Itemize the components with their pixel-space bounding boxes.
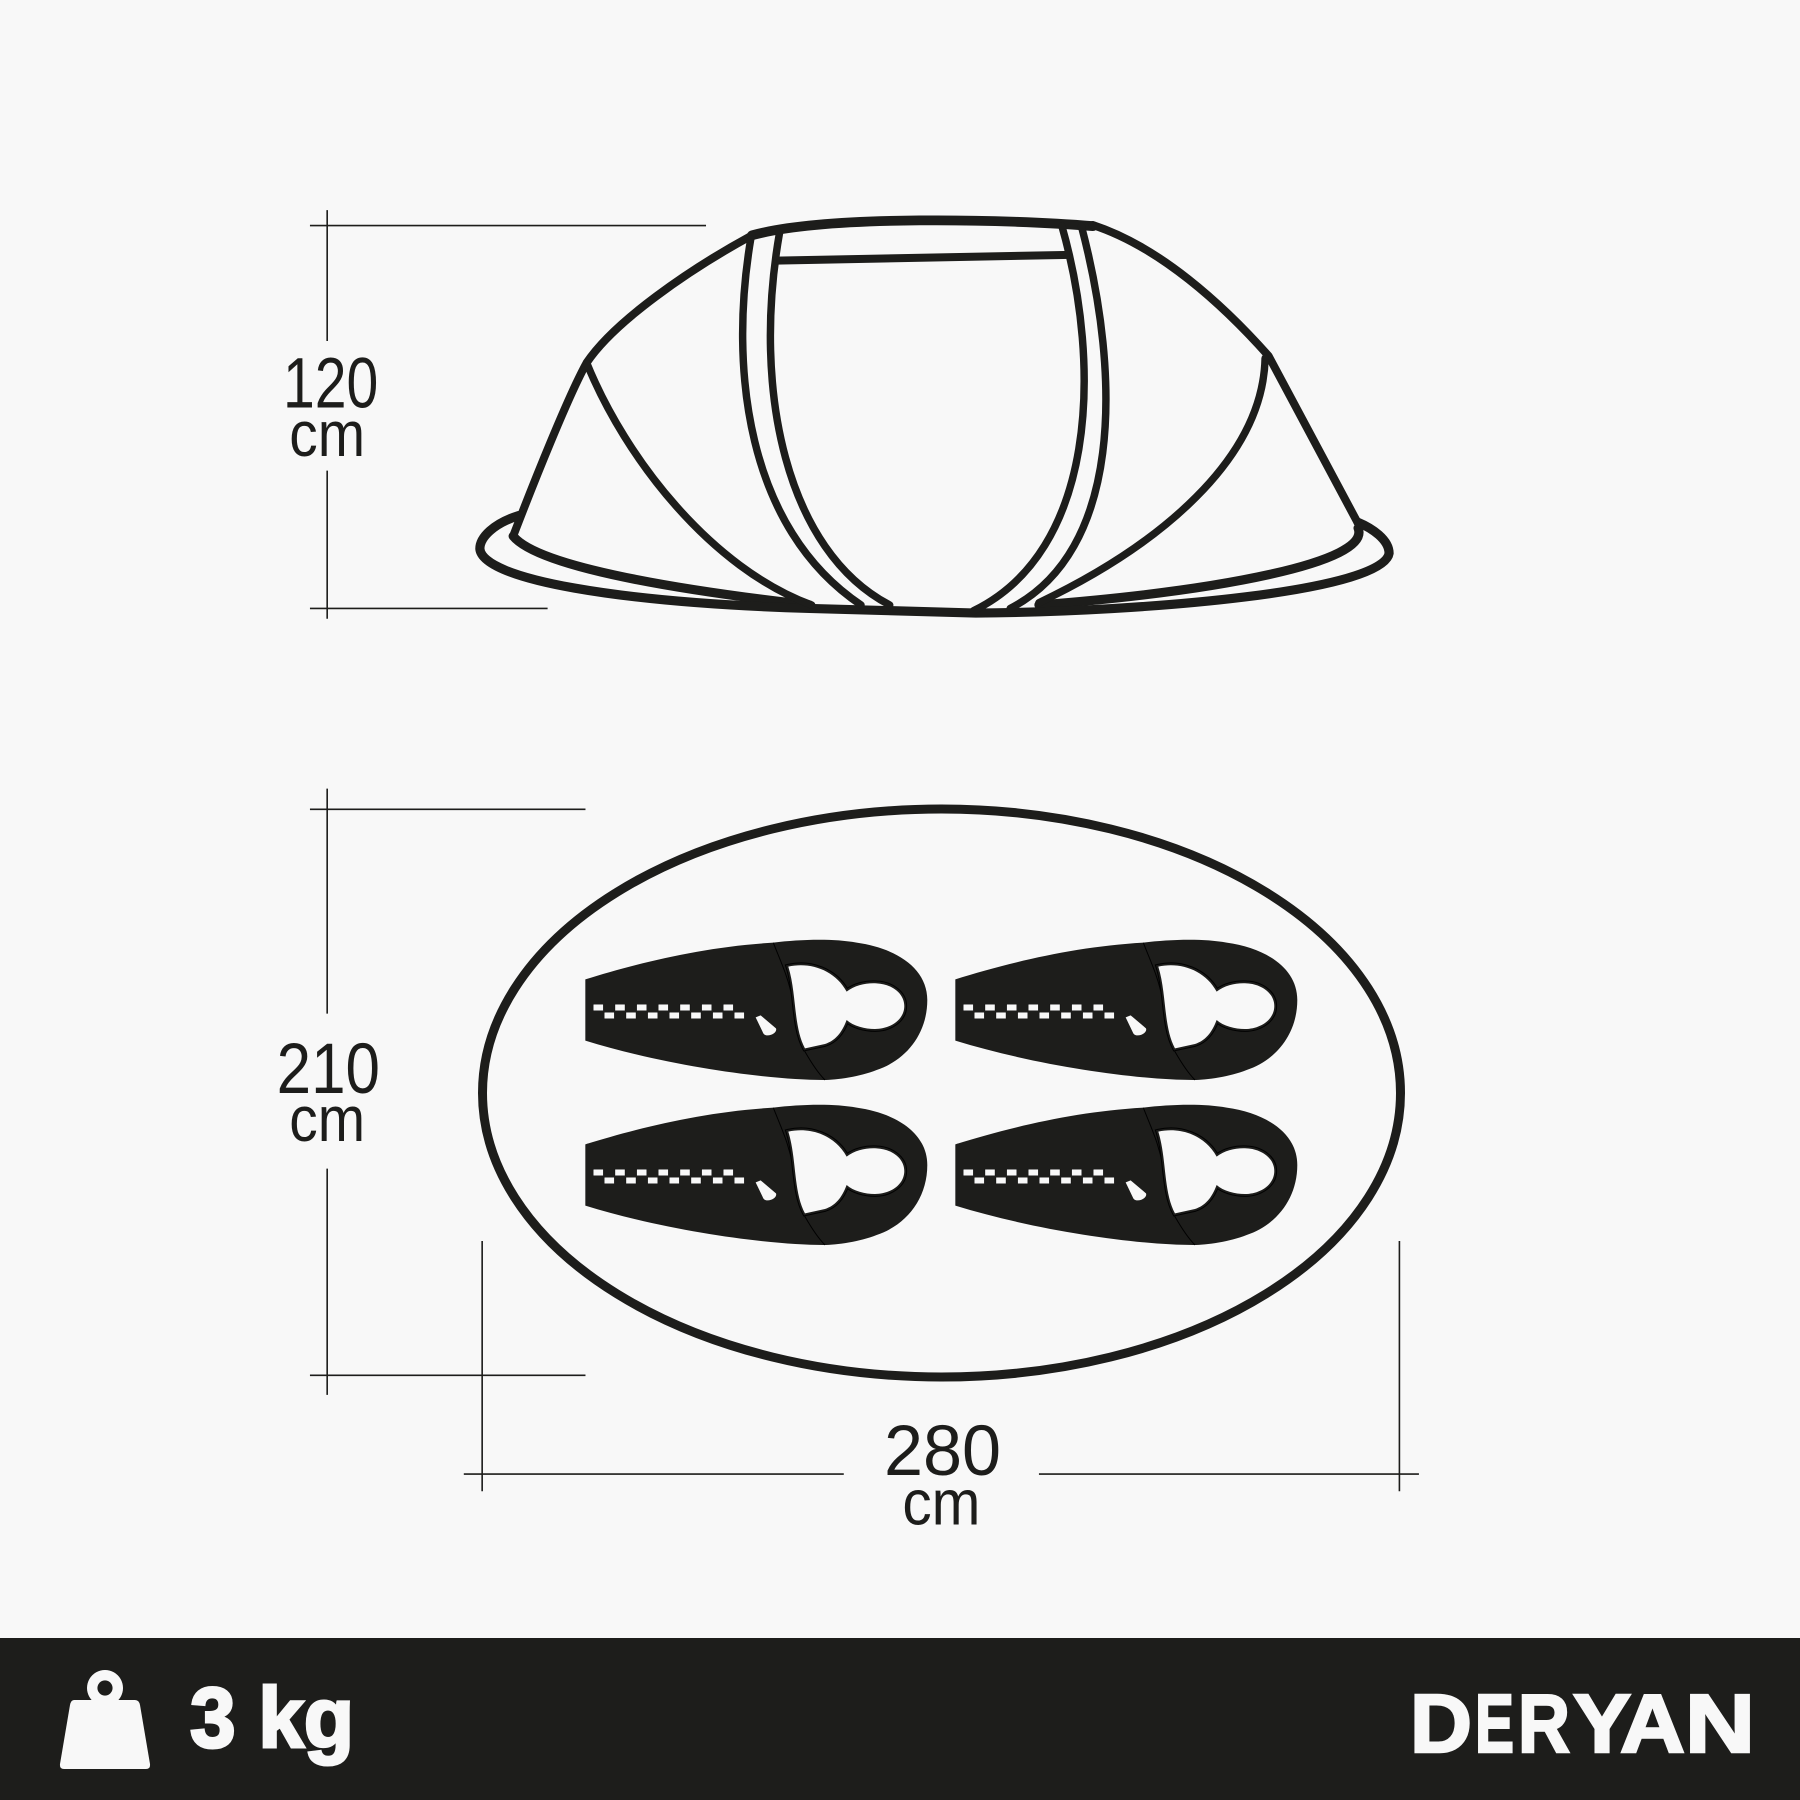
- label cm: cm: [289, 398, 365, 470]
- label cm: cm: [902, 1467, 980, 1539]
- ground sheet outline: [480, 515, 1389, 613]
- label 210: 210: [277, 1030, 380, 1109]
- brand logo: E: [1475, 1677, 1514, 1770]
- sleeping bags: [585, 940, 1297, 1245]
- sleeping bag top left: [585, 940, 927, 1080]
- depth dimension 210 cm: [277, 789, 585, 1395]
- height dimension 120 cm: [283, 210, 706, 619]
- brand logo: Y: [1573, 1677, 1631, 1770]
- brand logo: R: [1518, 1677, 1570, 1770]
- floor plan ellipse: [482, 809, 1400, 1377]
- brand logo: D: [1410, 1677, 1472, 1770]
- tent outer shell: [513, 225, 1358, 536]
- tent side view: [480, 220, 1389, 613]
- label 280: 280: [884, 1412, 1001, 1491]
- icon: weight: [60, 1670, 150, 1769]
- tent inner hem: [513, 528, 1359, 605]
- height dimension lines: [310, 210, 706, 619]
- tent door: [743, 226, 1106, 611]
- tent side seams: [587, 358, 1265, 605]
- width dimension 280 cm: [464, 1241, 1419, 1539]
- width dimension lines: [464, 1241, 1419, 1491]
- weight value: 3 kg: [190, 1671, 354, 1766]
- label 120: 120: [283, 345, 378, 424]
- door top bar: [776, 255, 1070, 261]
- footer bar: [0, 1638, 1800, 1800]
- brand logo: N: [1685, 1677, 1755, 1770]
- sleeping bag bottom right: [955, 1105, 1297, 1245]
- label cm: cm: [289, 1083, 365, 1155]
- sleeping bag bottom left: [585, 1105, 927, 1245]
- depth dimension lines: [310, 789, 585, 1395]
- tent roof: [752, 220, 1093, 235]
- sleeping bag top right: [955, 940, 1297, 1080]
- brand logo: A: [1620, 1677, 1685, 1770]
